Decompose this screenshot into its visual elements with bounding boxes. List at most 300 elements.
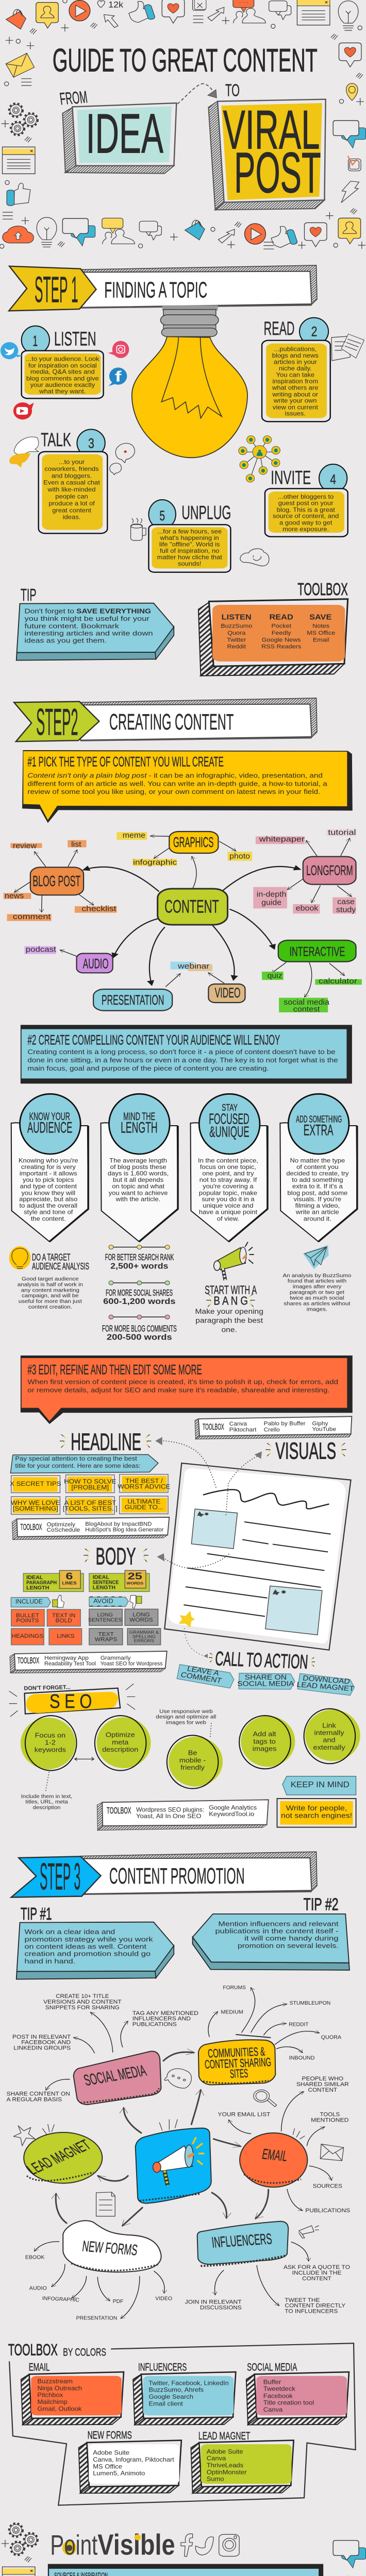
- toolbox card: lead magnet: LEAD MAGNET: [198, 2430, 251, 2442]
- toolbox card: influencers: Google Search: [148, 2394, 193, 2400]
- toolbox card: influencers: [133, 2361, 236, 2425]
- heading: toolbox by colors: TOOLBOX: [8, 2341, 58, 2359]
- headline idea boxes: WORST ADVICE: [118, 1483, 170, 1490]
- labels: content types: meme: [123, 832, 145, 840]
- list: avoid: WORDS: [129, 1617, 153, 1623]
- headline idea boxes: WHY WE LOVE: [11, 1500, 60, 1506]
- toolbox card: new forms: Canva, Infogram, Piktochart: [93, 2456, 174, 2463]
- stat: ideal paragraph length: IDEAL: [26, 1575, 43, 1581]
- panel: start with a bang: START WITH A: [205, 1283, 257, 1297]
- icon: envelope: [320, 2144, 344, 2161]
- stat: ideal paragraph length: [23, 1570, 84, 1591]
- labels: social media tactics: SNIPPETS FOR SHARING: [45, 2004, 120, 2010]
- text: use responsive web design: Use responsive web: [159, 1708, 213, 1715]
- logo: point visible: Point: [50, 2529, 97, 2561]
- panel: tip: [16, 586, 174, 660]
- banner: step 3: STEP 3: [40, 1855, 80, 1898]
- panel: images in articles: found that articles with: [288, 1278, 346, 1284]
- toolbox: seo: KeywordTool.io: [209, 1811, 254, 1818]
- chart: word count goals: [102, 1245, 177, 1342]
- button: download lead magnet: [296, 1673, 356, 1696]
- node: content: [158, 889, 227, 925]
- box: from idea: FROM: [59, 88, 89, 109]
- toolbox: visuals: [195, 1416, 352, 1439]
- icon: papers: [331, 334, 364, 361]
- stat: ideal paragraph length: LINES: [62, 1581, 77, 1586]
- panel: tip #1: hand in hand.: [25, 1958, 75, 1965]
- panel: talk: Even a casual chat: [43, 479, 100, 486]
- node: blog post: [30, 867, 84, 895]
- circle: link internally and externally: [304, 1709, 360, 1764]
- labels: email targets: CONTENT: [308, 2087, 337, 2093]
- panel: know your audience: to adjust the overall: [19, 1202, 77, 1209]
- toolbox card: social media: SOCIAL MEDIA: [247, 2361, 297, 2374]
- callout: headline ideas intro: [10, 1454, 158, 1473]
- stat: ideal sentence length: [89, 1570, 149, 1591]
- labels: influencers: TO INFLUENCERS: [285, 2308, 338, 2314]
- node: communities and content sharing sites: SITES: [229, 2066, 248, 2080]
- toolbox card: email: [21, 2361, 124, 2425]
- toolbox card: social media: Title creation tool: [263, 2399, 314, 2406]
- toolbox card: lead magnet: Canva: [207, 2455, 226, 2462]
- panel: tip #2: promotion on several levels.: [238, 1942, 339, 1950]
- toolbox: seo: Wordpress SEO plugins:: [136, 1806, 204, 1813]
- toolbox: body: TOOLBOX: [18, 1656, 39, 1665]
- icon: chat bubbles: [9, 437, 135, 475]
- panel: mind the length: of blog posts these: [110, 1164, 167, 1171]
- panel: read: 2: [311, 324, 317, 340]
- toolbox: headline: [12, 1517, 169, 1539]
- panel: tip: Don't forget to SAVE EVERYTHING: [25, 608, 151, 615]
- panel: stay focused and unique: FOCUSED: [209, 1111, 249, 1127]
- section: pick content type: [4, 750, 362, 1013]
- panel: toolbox: Email: [313, 636, 329, 643]
- panel: add something extra: of content you: [296, 1164, 339, 1171]
- circle: link internally and externally: internally: [314, 1729, 344, 1736]
- panel: add something extra: No matter the type: [290, 1157, 345, 1164]
- callout: keep in mind: Write for people,: [286, 1804, 347, 1812]
- list: avoid: WRAPS: [95, 1637, 117, 1642]
- node: graphics: [169, 832, 218, 853]
- banner: step 1: STEP 1: [35, 269, 78, 311]
- labels: social media tactics: CREATE 10+ TITLE: [56, 1993, 109, 1999]
- box: from idea: [59, 88, 176, 174]
- panel: tip #2: publications in the content itself -: [215, 1928, 339, 1935]
- panel: images in articles: shares as articles without: [284, 1301, 350, 1307]
- labels: content types: social media: [284, 998, 330, 1007]
- toolbox card: lead magnet: OptinMonster: [207, 2469, 247, 2476]
- panel: invite: more exposure.: [282, 526, 329, 533]
- toolbox: seo: Google Analytics: [209, 1804, 257, 1811]
- stat: ideal sentence length: SENTENCE: [93, 1580, 119, 1585]
- node: video: [208, 984, 245, 1003]
- toolbox: visuals: Piktochart: [229, 1427, 257, 1433]
- labels: content types: [4, 828, 362, 1013]
- icon: social media bubbles: [1, 341, 129, 419]
- labels: content types: photo: [229, 852, 250, 860]
- section: column footers: FOR MORE SOCIAL SHARES: [106, 1288, 173, 1298]
- toolbox card: new forms: [79, 2429, 181, 2493]
- circle: add alt tags: Add alt: [253, 1731, 276, 1738]
- section: column footers: FOR BETTER SEARCH RANK: [105, 1252, 174, 1262]
- panel: start with a bang: B A N G: [213, 1294, 248, 1308]
- panel: mind the length: MIND THE: [123, 1111, 155, 1123]
- chart: content mind map: [4, 828, 362, 1013]
- list: include: TEXT IN: [52, 1613, 75, 1619]
- section: document and content parts: [9, 1437, 356, 1717]
- panel: know your audience: you know they will: [21, 1190, 75, 1196]
- node: megaphone hub: [136, 2120, 211, 2204]
- panel: tip: ideas as you get them.: [25, 637, 107, 645]
- panel: target audience analysis: any content marketing: [21, 1287, 79, 1293]
- panel: unplug: ...for a few hours, see: [157, 528, 222, 535]
- panel: talk: TALK: [41, 429, 71, 450]
- node: social media: [74, 2051, 161, 2105]
- callout: #2 create compelling content: [21, 1025, 352, 1083]
- labels: social media tactics: PUBLICATIONS: [132, 2021, 177, 2027]
- section: unplug tip and toolbox: [14, 500, 348, 743]
- labels: influencers: JOIN IN RELEVANT: [185, 2299, 242, 2305]
- text: include keywords: Include them in text,: [21, 1793, 72, 1800]
- circle: be mobile friendly: friendly: [180, 1764, 205, 1771]
- toolbox card: email: Ninja Outreach: [37, 2385, 82, 2392]
- labels: email targets: SHARED SIMILAR: [296, 2081, 349, 2087]
- toolbox card: influencers: Email client: [148, 2400, 183, 2407]
- button: leave a comment: COMMENT: [180, 1671, 223, 1685]
- panel: stay focused and unique: of view.: [217, 1215, 239, 1222]
- section: footer: [48, 2529, 323, 2576]
- heading: seo: S E O: [49, 1690, 92, 1712]
- list: include: [11, 1595, 81, 1645]
- toolbox: visuals: TOOLBOX: [203, 1422, 224, 1432]
- panel: listen: your audience exactly: [30, 382, 95, 388]
- panel: read: You can take: [276, 371, 314, 378]
- toolbox card: lead magnet: [191, 2430, 294, 2493]
- toolbox: body: Readability Test Tool: [44, 1660, 96, 1667]
- callout: #1 pick the type of content: different form of an article as well. You can write an in-depth guide, a how-to tutorial, a: [27, 780, 327, 788]
- toolbox card: new forms: NEW FORMS: [88, 2429, 132, 2441]
- panel: listen: what they want.: [39, 388, 86, 395]
- panel: add something extra: visuals. If you're: [294, 1196, 341, 1202]
- labels: content types: news: [5, 892, 24, 900]
- node: influencers: INFLUENCERS: [211, 2230, 273, 2251]
- labels: new forms: EBOOK: [25, 2254, 45, 2260]
- list: include: POINTS: [16, 1618, 39, 1624]
- panel: toolbox: READ: [270, 613, 293, 621]
- chart: content mind map: BLOG POST: [32, 873, 80, 890]
- panel: read: niche daily.: [279, 365, 312, 372]
- node: audio: AUDIO: [83, 956, 109, 971]
- panel: know your audience: the content.: [31, 1215, 66, 1222]
- icons: social outlines: [181, 2534, 239, 2556]
- toolbox: headline: CoSchedule: [47, 1527, 80, 1533]
- panel: toolbox: Reddit: [227, 643, 246, 650]
- panel: stay focused and unique: &UNIQUE: [209, 1124, 249, 1140]
- labels: content types: comment: [13, 912, 51, 921]
- circle: focus on keywords: 1-2: [45, 1739, 56, 1746]
- button: leave a comment: [177, 1665, 234, 1688]
- panel: talk: 3: [88, 435, 94, 451]
- headline idea boxes: X SECRET TIPS: [10, 1481, 61, 1487]
- toolbox card: lead magnet: ThriveLeads: [207, 2462, 243, 2469]
- labels: email targets: YOUR EMAIL LIST: [218, 2111, 270, 2117]
- panel: know your audience: Knowing who you're: [19, 1157, 78, 1164]
- panel: target audience analysis: campaign, and will be: [22, 1293, 79, 1299]
- panel: toolbox: Google News: [262, 636, 301, 643]
- panel: mind the length: with the article.: [115, 1196, 160, 1202]
- icon: large light bulb: [132, 306, 247, 457]
- panel: start with a bang: [195, 1283, 263, 1334]
- list: avoid: SENTENCES: [88, 1618, 122, 1623]
- button: download lead magnet: DOWNLOAD: [302, 1674, 351, 1686]
- panel: listen: [22, 326, 104, 398]
- panel: toolbox: RSS Readers: [261, 643, 301, 650]
- panel: mind the length: on topic and what: [112, 1183, 165, 1190]
- icon: people network: [239, 436, 280, 482]
- labels: communities: [221, 1985, 341, 2061]
- panel: read: what others are: [272, 384, 319, 391]
- toolbox: body: Yoast SEO for Wordpress: [101, 1660, 163, 1667]
- callout: keep in mind: KEEP IN MIND: [291, 1780, 350, 1789]
- section: column footers: AUDIENCE ANALYSIS: [32, 1261, 89, 1272]
- panel: stay focused and unique: not to stray away. If: [199, 1177, 257, 1183]
- toolbox card: social media: Facebook: [263, 2393, 293, 2399]
- toolbox: visuals: Crello: [264, 1427, 280, 1433]
- panel: stay focused and unique: unique voice and: [203, 1202, 254, 1209]
- toolbox card: social media: Canva: [263, 2406, 282, 2413]
- labels: new forms: INFOGRAPHIC: [42, 2295, 80, 2303]
- button: share on social media: SHARE ON: [245, 1674, 287, 1682]
- labels: social media tactics: TAG ANY MENTIONED: [132, 2010, 198, 2016]
- node: interactive: [278, 940, 356, 962]
- panel: read: blogs and news: [272, 352, 319, 359]
- panel: add something extra: write an article: [295, 1209, 339, 1215]
- arrow: double headed: [75, 1757, 94, 1760]
- stat: ideal paragraph length: 6: [65, 1571, 73, 1581]
- panel: unplug: 5: [159, 508, 165, 523]
- panel: stay focused and unique: sure you do it in a: [202, 1196, 255, 1202]
- circle: focus on keywords: [21, 1716, 77, 1771]
- labels: new forms: VIDEO: [155, 2295, 172, 2301]
- text: include keywords: titles, URL, meta: [25, 1799, 68, 1805]
- labels: content types: study: [336, 906, 356, 914]
- chart: word count goals: 2,500+ words: [110, 1261, 168, 1270]
- toolbox card: email: Buzzstream: [37, 2378, 73, 2385]
- callout: keep in mind: [277, 1776, 356, 1827]
- circle: link internally and externally: externally: [313, 1744, 345, 1751]
- section: seo circles: [11, 1708, 360, 1979]
- node: email: [240, 2129, 307, 2187]
- arrows: to labels: [46, 1988, 331, 2211]
- panel: read: [262, 318, 330, 421]
- button: leave a comment: LEAVE A: [186, 1665, 220, 1677]
- list: avoid: LONG: [132, 1612, 150, 1618]
- list: include: BULLET: [16, 1613, 39, 1619]
- panel: mind the length: The average length: [109, 1157, 167, 1164]
- stat: ideal paragraph length: LENGTH: [26, 1585, 49, 1591]
- panel: mind the length: [101, 1094, 178, 1242]
- panel: toolbox: Notes: [312, 622, 329, 629]
- node: content: CONTENT: [164, 896, 219, 917]
- toolbox card: influencers: BuzzSumo, Ahrefs: [148, 2386, 204, 2393]
- panel: target audience analysis: Good target audience: [22, 1276, 79, 1282]
- logo: point visible: Visible: [97, 2529, 175, 2561]
- toolbox: seo: [97, 1800, 269, 1831]
- panel: listen: LISTEN: [54, 328, 96, 350]
- labels: influencers: ASK FOR A QUOTE TO: [284, 2264, 350, 2270]
- labels: content types: infographic: [133, 858, 177, 867]
- labels: email targets: SOURCES: [313, 2182, 342, 2189]
- node: communities and content sharing sites: COMMUNITIES &: [207, 2045, 265, 2060]
- labels: email targets: MENTIONED: [311, 2116, 349, 2123]
- labels: new forms: [25, 2254, 172, 2321]
- circle: optimize meta description: [95, 1716, 151, 1771]
- section: column footers: HEADLINE: [71, 1428, 141, 1455]
- labels: communities: MEDIUM: [221, 2009, 243, 2015]
- node: new forms: NEW FORMS: [81, 2238, 139, 2259]
- panel: target audience analysis: [9, 1246, 89, 1310]
- panel: tip #1: on content ideas as well. Content: [25, 1943, 147, 1951]
- panel: toolbox: Pocket: [271, 622, 292, 629]
- banner: step 1: FINDING A TOPIC: [104, 277, 207, 302]
- toolbox: body: Grammarly: [101, 1655, 131, 1661]
- list: avoid: ERRORS: [134, 1638, 154, 1643]
- panel: unplug: matter how cliche that: [157, 554, 222, 561]
- panel: images in articles: images after every: [293, 1284, 342, 1290]
- banner: step 1: [9, 265, 317, 311]
- icon: chat bubble: [164, 2069, 191, 2088]
- headline idea boxes: [10, 1475, 170, 1514]
- panel: add something extra: blog post, add some: [287, 1190, 347, 1196]
- panel: stay focused and unique: you're covering a: [203, 1183, 254, 1190]
- panel: know your audience: AUDIENCE: [27, 1118, 72, 1136]
- panel: tip #2: Mention influencers and relevant: [218, 1920, 339, 1928]
- panel: tip #1: Work on a clear idea and: [25, 1928, 115, 1936]
- heading: headline: [60, 1428, 151, 1455]
- toolbox card: social media: Buffer: [263, 2379, 281, 2385]
- panel: listen: blog comments and give: [26, 375, 99, 382]
- toolbox card: social media: Tweetdeck: [263, 2385, 296, 2392]
- circle: be mobile friendly: mobile -: [179, 1757, 206, 1764]
- heading: seo: DON'T FORGET...: [24, 1684, 71, 1691]
- text: use responsive web design: design and optimize all: [156, 1714, 216, 1720]
- panel: add something extra: to add something: [292, 1177, 343, 1183]
- labels: social media tactics: A REGULAR BASIS: [7, 2096, 62, 2103]
- panel: unplug: life "offline". World is: [159, 541, 220, 548]
- list: include: INCLUDE: [15, 1599, 43, 1605]
- panel: start with a bang: paragraph the best: [195, 1317, 263, 1325]
- labels: content types: webinar: [177, 962, 209, 970]
- labels: influencers: DISCUSSIONS: [200, 2304, 242, 2311]
- panel: know your audience: creating for is very: [21, 1164, 76, 1171]
- list: avoid: GRAMMAR &: [129, 1630, 159, 1635]
- panel: target audience analysis: DO A TARGET: [32, 1252, 71, 1263]
- labels: content types: ebook: [296, 904, 319, 912]
- labels: social media tactics: POST IN RELEVANT: [12, 2033, 71, 2040]
- panel: tip: future content. Bookmark: [25, 622, 119, 630]
- panel: unplug: what's happening in: [159, 535, 219, 541]
- panel: toolbox: LISTEN: [222, 613, 252, 621]
- panel: unplug: full of inspiration, no: [160, 548, 220, 554]
- panel: invite: ...other bloggers to: [278, 494, 334, 500]
- icon: star: [13, 2126, 35, 2146]
- toolbox: body: [10, 1651, 167, 1673]
- labels: communities: STUMBLEUPON: [289, 2000, 330, 2006]
- toolbox card: social media: [246, 2361, 349, 2425]
- toolbox card: email: Gmail, Outlook: [37, 2405, 82, 2412]
- panel: mind the length: but it all depends: [113, 1177, 163, 1183]
- list: avoid: [88, 1596, 161, 1645]
- panel: toolbox: Twitter: [227, 636, 246, 643]
- circle: optimize meta description: description: [102, 1746, 138, 1753]
- labels: content types: tutorial: [328, 828, 356, 837]
- panel: images in articles: images.: [307, 1307, 327, 1312]
- list: include: HEADINGS: [11, 1633, 43, 1639]
- icon: document: [96, 2192, 115, 2216]
- toolbox: headline: HubSpot's Blog Idea Generator: [85, 1526, 164, 1533]
- labels: email targets: PUBLICATIONS: [305, 2207, 350, 2213]
- heading: call to action: [209, 1648, 315, 1673]
- panel: add something extra: [280, 1094, 357, 1242]
- button: share on social media: [237, 1673, 295, 1689]
- panel: unplug: [148, 500, 231, 572]
- logo: point visible: [50, 2529, 175, 2561]
- illustration: document page: [164, 1463, 351, 1650]
- callout: keep in mind: not search engines!: [281, 1811, 352, 1820]
- headline idea boxes: [TOOLS, SITES..]: [63, 1505, 118, 1512]
- toolbox: headline: TOOLBOX: [20, 1522, 42, 1532]
- circle: focus on keywords: keywords: [35, 1746, 66, 1753]
- icon: outline megaphone: [299, 2226, 319, 2238]
- button: download lead magnet: LEAD MAGNET: [296, 1681, 355, 1693]
- section: new forms and influencers: [8, 2221, 356, 2505]
- circle: be mobile friendly: [167, 1735, 223, 1789]
- panel: add something extra: around it.: [304, 1215, 331, 1222]
- circle: add alt tags: [239, 1716, 295, 1769]
- arrows: dotted document links: [155, 1437, 262, 1658]
- labels: communities: QUORA: [321, 2034, 341, 2040]
- labels: email targets: [218, 2075, 350, 2213]
- heading: body: [84, 1543, 148, 1570]
- circle: optimize meta description: meta: [112, 1739, 129, 1746]
- toolbox card: email: Mailchimp: [37, 2399, 68, 2405]
- panel: know your audience: you to pick topics: [23, 1177, 74, 1183]
- panel: know your audience: KNOW YOUR: [29, 1111, 70, 1123]
- headline idea boxes: THE BEST /: [125, 1478, 163, 1484]
- panel: read: articles in your: [274, 359, 317, 365]
- toolbox: seo: TOOLBOX: [107, 1806, 131, 1816]
- toolbox: headline: Optimizely: [47, 1522, 75, 1528]
- text: include keywords: description: [33, 1805, 61, 1810]
- button: share on social media: SOCIAL MEDIA: [237, 1680, 294, 1688]
- circle: add alt tags: tags to: [253, 1738, 276, 1745]
- node: influencers: [197, 2222, 288, 2266]
- toolbox: seo: Yoast, All In One SEO: [136, 1813, 201, 1820]
- panel: mind the length: LENGTH: [121, 1118, 158, 1136]
- icon: coffee mug: [131, 518, 146, 540]
- labels: content types: in-depth: [257, 890, 286, 899]
- section: promotion map: CONTENT SHARING: [204, 2055, 272, 2071]
- banner: step 3: [11, 1852, 317, 1898]
- node: email: EMAIL: [261, 2146, 289, 2165]
- section: compelling content: [11, 1025, 357, 1242]
- toolbox: visuals: YouTube: [312, 1427, 336, 1432]
- text: include keywords: [21, 1772, 72, 1810]
- dashed arrow: idea to viral post: [177, 83, 217, 104]
- labels: new forms: PDF: [113, 2298, 124, 2304]
- panel: start with a bang: one.: [222, 1326, 237, 1334]
- panel: know your audience: appreciate, but also: [19, 1196, 78, 1202]
